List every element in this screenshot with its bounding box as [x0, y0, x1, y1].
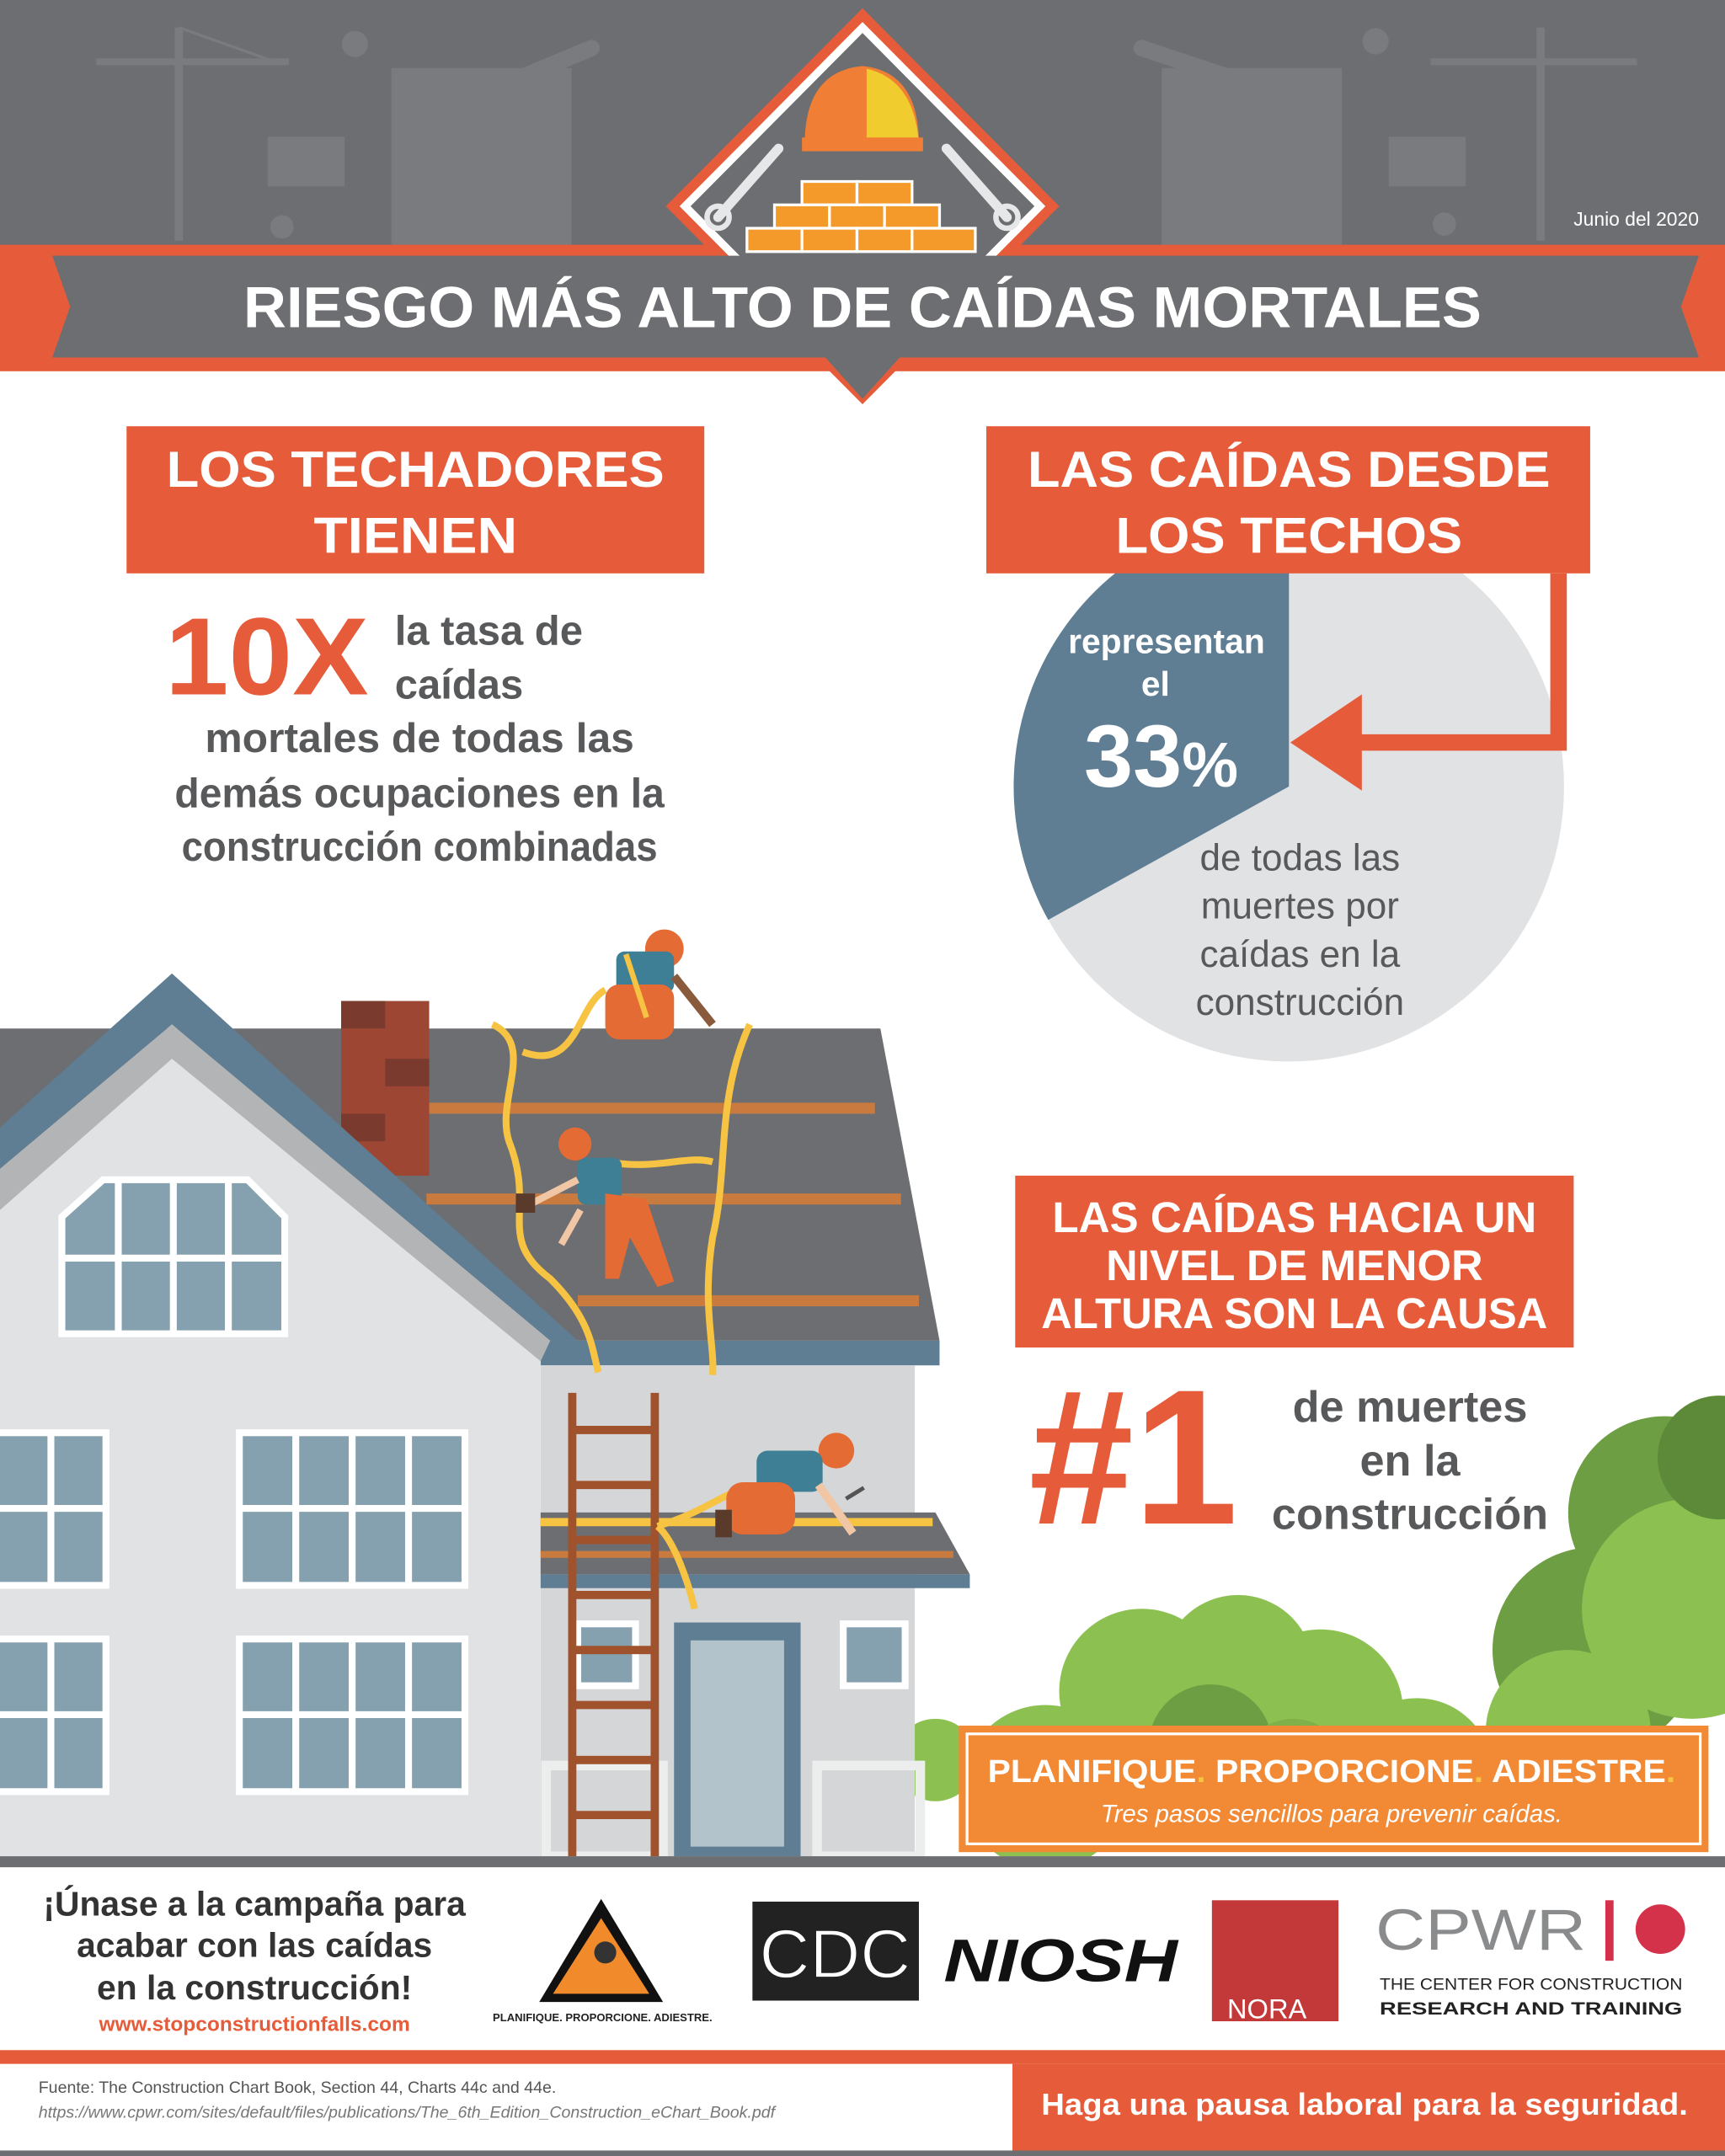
orange divider band [0, 2050, 1725, 2064]
stat: 10X: mortales de todas las [205, 716, 634, 761]
orange band [0, 245, 1725, 371]
campaign text: www.stopconstructionfalls.com [99, 2013, 410, 2036]
ladder [572, 1393, 654, 1856]
date: Junio del 2020 [1573, 208, 1699, 230]
door [674, 1623, 801, 1856]
logo: stop falls triangle [493, 1899, 713, 2024]
stat: 10X: demás ocupaciones en la [174, 771, 665, 816]
title banner [52, 256, 1699, 398]
campaign text: ¡Únase a la campaña para [43, 1884, 466, 1923]
panel: caídas desde los techos heading: LOS TECHOS [1116, 506, 1462, 563]
panel: techadores heading: TIENEN [313, 506, 517, 563]
annex wall [541, 1365, 915, 1856]
callout: planifique proporcione adiestre: PLANIFIQUE . PROPORCIONE . ADIESTRE . [988, 1753, 1675, 1789]
diamond emblem [665, 8, 1060, 404]
source footnote: Fuente: The Construction Chart Book, Section 44, Charts 44c and 44e. [39, 2079, 556, 2097]
callout: planifique proporcione adiestre: Tres pasos sencillos para prevenir caídas. [1101, 1800, 1562, 1828]
stat: 10X: 10X [165, 595, 369, 718]
stat: 10X [165, 595, 665, 870]
logo: CPWR: CPWR [1375, 1897, 1586, 1962]
logo: CPWR: RESEARCH AND TRAINING [1380, 1999, 1682, 2019]
stat: #1 [1029, 1350, 1548, 1565]
logo: NORA [1212, 1900, 1338, 2025]
stat: #1: en la [1359, 1437, 1461, 1486]
source footnote [39, 2079, 777, 2121]
logo: NORA: NORA [1227, 1993, 1307, 2025]
logo: CPWR [1375, 1897, 1685, 2019]
campaign text: en la construcción! [97, 1968, 412, 2007]
panel: caídas hacia un nivel heading: ALTURA SON LA CAUSA [1041, 1289, 1547, 1337]
worker: top [606, 930, 713, 1039]
main roof [0, 1028, 939, 1341]
panel: techadores heading [126, 426, 704, 574]
logo: CDC: CDC [760, 1916, 911, 1993]
stat: 10X: caídas [395, 662, 523, 707]
divider strip [0, 1856, 1725, 1867]
source footnote: https://www.cpwr.com/sites/default/files/publications/The_6th_Edition_Construction_eChart_Book.pdf [39, 2103, 777, 2121]
stat: #1: de muertes [1293, 1383, 1527, 1432]
header background with construction silhouettes [0, 0, 1725, 248]
footer slogan: Haga una pausa laboral para la seguridad. [1041, 2087, 1688, 2121]
logo: stop falls triangle: PLANIFIQUE. PROPORCIONE. ADIESTRE. [493, 2011, 713, 2024]
stat: #1: construcción [1272, 1491, 1548, 1540]
icon: bricks [747, 182, 975, 252]
stat: 10X: construcción combinadas [182, 825, 658, 870]
logo: NIOSH: NIOSH [943, 1928, 1180, 1995]
icon: hard hat [802, 66, 923, 152]
pie chart: 33%: caídas en la [1199, 934, 1401, 975]
panel: caídas desde los techos heading: LAS CAÍDAS DESDE [1028, 440, 1551, 498]
campaign text [43, 1884, 466, 2036]
icon: wrenches [707, 148, 1018, 228]
campaign text: acabar con las caídas [77, 1925, 432, 1964]
pie chart: 33% [1013, 511, 1564, 1061]
arrow: to pie [1290, 574, 1558, 791]
title banner: RIESGO MÁS ALTO DE CAÍDAS MORTALES [243, 275, 1482, 340]
pie chart: 33%: construcción [1196, 982, 1404, 1023]
footer slogan [1012, 2064, 1725, 2156]
pie chart: 33%: de todas las [1199, 837, 1400, 878]
callout: planifique proporcione adiestre [959, 1726, 1708, 1852]
logo: CDC [752, 1902, 919, 2001]
stat: #1: #1 [1029, 1350, 1238, 1565]
porch roof [541, 1513, 969, 1574]
railings [546, 1765, 921, 1856]
pie chart: 33%: muertes por [1201, 886, 1399, 927]
panel: caídas hacia un nivel heading [1015, 1176, 1573, 1348]
worker: middle [515, 1128, 674, 1287]
panel: caídas hacia un nivel heading: NIVEL DE MENOR [1106, 1241, 1483, 1289]
trees [895, 1396, 1725, 1870]
panel: caídas hacia un nivel heading: LAS CAÍDAS HACIA UN [1052, 1193, 1536, 1241]
pie chart: 33%: 33% [1084, 707, 1238, 806]
main wall with gable [0, 1034, 541, 1856]
safety ropes [493, 990, 750, 1609]
chimney [341, 1001, 430, 1176]
panel: caídas desde los techos heading [986, 426, 1590, 574]
pie chart: 33%: representan [1068, 622, 1265, 661]
panel: techadores heading: LOS TECHADORES [167, 440, 665, 498]
worker: lower [715, 1433, 864, 1537]
house illustration [0, 930, 969, 1856]
logo: CPWR: THE CENTER FOR CONSTRUCTION [1380, 1975, 1682, 1993]
stat: 10X: la tasa de [395, 609, 583, 654]
pie chart: 33%: el [1141, 664, 1170, 703]
windows [0, 1180, 905, 1791]
